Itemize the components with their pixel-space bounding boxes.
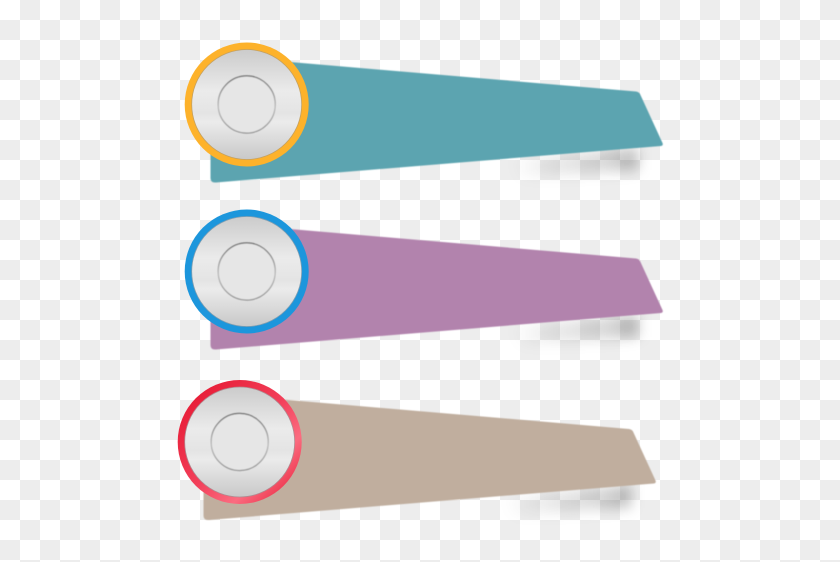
panel: purple banner with blue badge: [185, 210, 663, 350]
shadow: teal banner: [510, 147, 638, 178]
shadow: purple banner: [510, 314, 638, 345]
panel: tan banner with red badge: [178, 380, 656, 520]
banner: purple: [210, 229, 663, 350]
badge: red ring: [178, 380, 302, 504]
panel: teal banner with orange badge: [185, 42, 663, 183]
banner: teal: [210, 62, 663, 183]
badge: orange ring: [185, 42, 309, 166]
shadow: tan banner: [503, 484, 631, 516]
banner: tan: [204, 400, 656, 520]
badge: blue ring: [185, 210, 309, 334]
